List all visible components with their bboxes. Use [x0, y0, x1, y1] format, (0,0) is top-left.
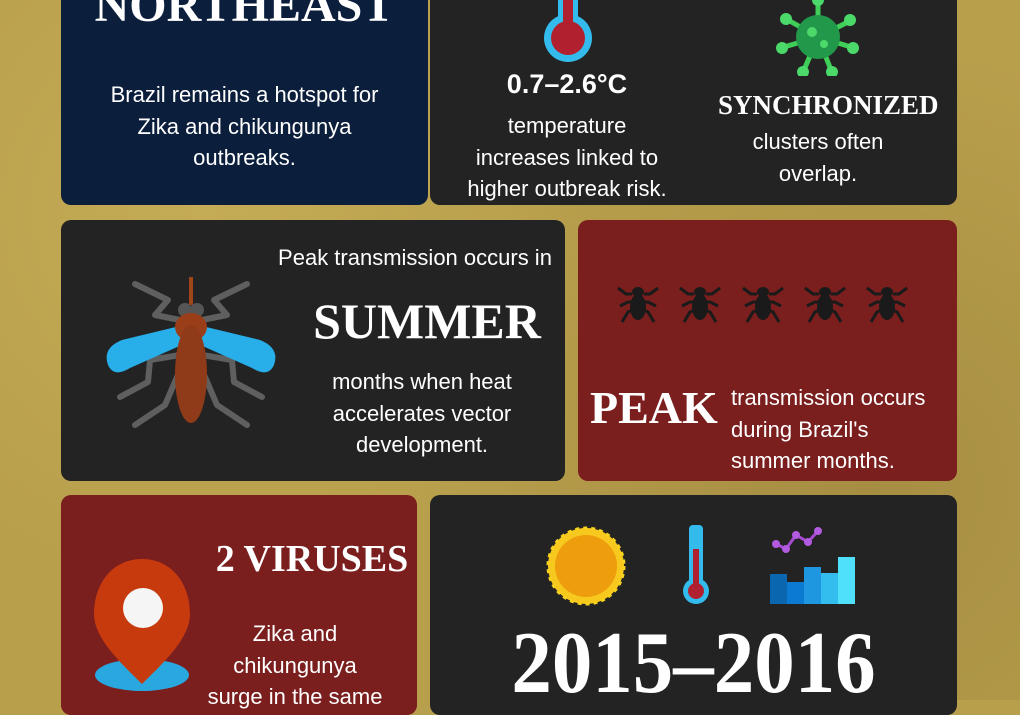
panel: northeast — [61, 0, 428, 205]
panel: summer — [61, 220, 565, 481]
text: zika and chikungunya: surge in the same — [208, 684, 382, 709]
text: temperature: increases linked to — [476, 144, 658, 170]
text: during summer months — [731, 385, 925, 473]
icon: sun — [546, 526, 626, 606]
heading: 2015-2016: 2015–2016 — [511, 615, 876, 712]
stat: temperature: 0.7–2.6°C — [507, 69, 627, 99]
text: months: months when heat — [332, 369, 512, 394]
icon: chart — [770, 527, 855, 604]
text: brazil hotspot — [111, 82, 378, 170]
panel: 2 viruses — [61, 495, 417, 715]
heading: synchronized: SYNCHRONIZED — [718, 90, 939, 120]
text: months: development. — [356, 432, 488, 457]
text: clusters overlap: clusters often — [753, 129, 883, 154]
panel: peak — [578, 220, 957, 481]
text: temperature: higher outbreak risk. — [467, 176, 667, 201]
heading: PEAK: PEAK — [590, 382, 718, 433]
text: zika and chikungunya: chikungunya — [233, 652, 357, 678]
icon: mosquito — [106, 277, 276, 428]
panel: temperature and synchronized — [430, 0, 957, 205]
text: during summer months: transmission occurs — [731, 385, 925, 410]
text: clusters overlap — [753, 129, 883, 186]
text: during summer months: summer months. — [731, 448, 895, 473]
text: brazil hotspot: outbreaks. — [193, 145, 296, 170]
panel: 2015-2016 — [430, 495, 957, 715]
text: brazil hotspot: Zika and chikungunya — [137, 114, 352, 138]
icon: location pin — [94, 559, 190, 691]
text: peak transmission occurs in: Peak transmission occurs in — [278, 245, 552, 270]
icon: thermometer — [683, 525, 709, 604]
text: clusters overlap: overlap. — [779, 160, 857, 186]
text: months — [332, 369, 512, 457]
text: zika and chikungunya — [208, 621, 382, 709]
icon row: mosquitoes — [617, 286, 908, 323]
text: months: accelerates vector — [333, 400, 511, 426]
heading: 2 VIRUSES: 2 VIRUSES — [216, 538, 408, 580]
heading: SUMMER: SUMMER — [313, 293, 541, 349]
icon: thermometer — [544, 0, 592, 62]
text: zika and chikungunya: Zika and — [253, 621, 337, 646]
icon: virus — [776, 0, 859, 76]
text: temperature — [467, 113, 667, 201]
text: during summer months: during Brazil's — [731, 416, 868, 442]
text: temperature: temperature — [508, 113, 626, 138]
text: brazil hotspot: Brazil remains a hotspot for — [111, 82, 378, 107]
